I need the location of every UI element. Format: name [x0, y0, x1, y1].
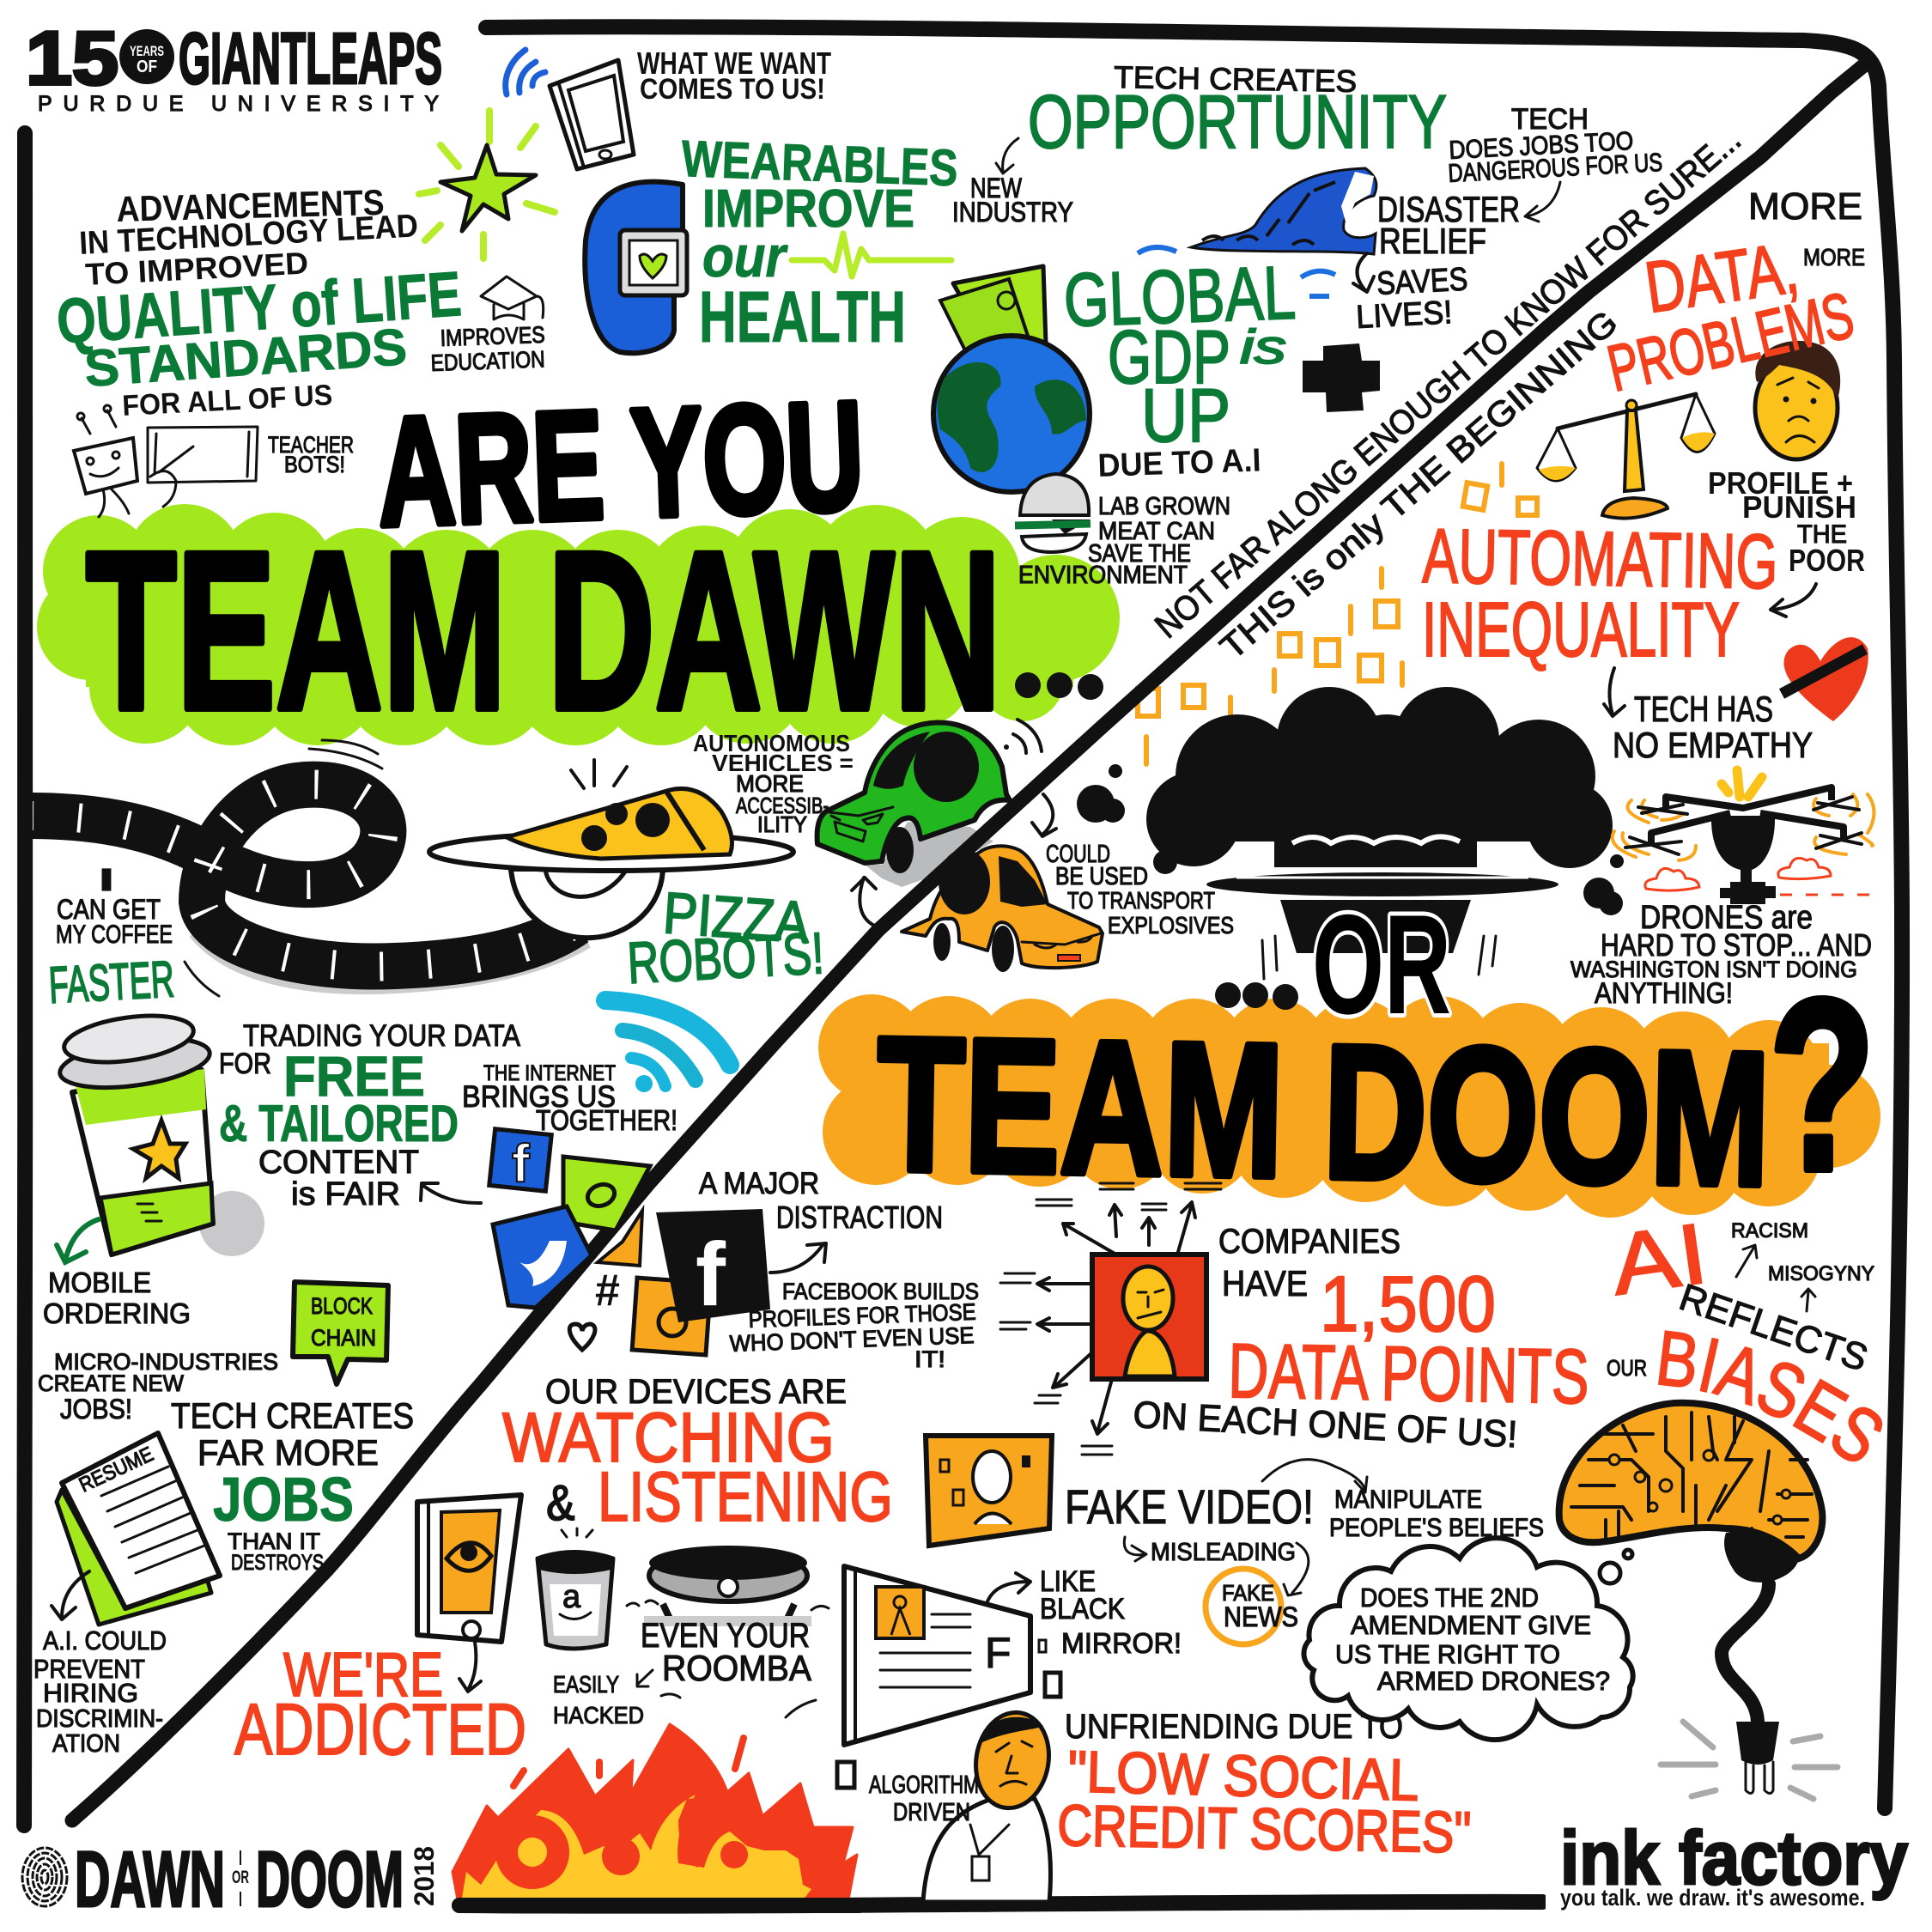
text: even your roomba: HACKED: [553, 1702, 644, 1728]
icon: graduation cap: [481, 276, 544, 319]
wifi over phone: [506, 50, 545, 94]
heading: pizza robots: ROBOTS!: [626, 920, 825, 996]
text: advancements: ADVANCEMENTS: [116, 182, 385, 229]
icon: facebook black square: f: [696, 1224, 726, 1325]
text: fake video: FAKE VIDEO!: [1065, 1479, 1314, 1534]
text: ai could prevent: PREVENT: [33, 1654, 145, 1684]
text: ai could prevent: HIRING: [43, 1678, 138, 1708]
logo: 150 years of giant leaps: OF: [137, 58, 157, 76]
text: drones: ANYTHING!: [1595, 977, 1733, 1010]
text: improves education: IMPROVES: [440, 322, 545, 351]
text: ai reflects our biases: MISOGYNY: [1768, 1262, 1874, 1285]
text: could be used: [1046, 841, 1234, 939]
robot base: [511, 869, 663, 938]
text: trading your data: FOR: [219, 1048, 271, 1080]
icon: hash and heart: #: [595, 1266, 620, 1315]
text: ai could prevent: ATION: [52, 1730, 120, 1758]
road illustration: [30, 740, 580, 996]
text: profile and punish: PROFILE +: [1708, 465, 1853, 501]
text: micro industries: [38, 1349, 278, 1425]
text: major distraction: PROFILES FOR THOSE: [748, 1299, 976, 1333]
logo: 150 years of giant leaps: 15: [26, 15, 118, 100]
text: lab grown meat: [1018, 493, 1230, 589]
plate: [429, 833, 793, 871]
orange blob: team doom background: [818, 994, 1880, 1218]
text: ai could prevent: [33, 1571, 167, 1758]
icon: hash and heart: [569, 1266, 620, 1350]
whiteboard: [148, 427, 258, 483]
text: disaster relief: RELIEF: [1379, 221, 1486, 261]
icon: scales of justice: [1537, 394, 1715, 519]
heading: unfriending low social credit scores: CREDIT SCORES": [1057, 1793, 1472, 1865]
logo: 150 years of giant leaps: GIANTLEAPS: [179, 18, 442, 99]
heading: our devices are watching and listening: OUR DEVICES ARE: [545, 1373, 847, 1411]
icon: phone: [550, 60, 634, 169]
text: even your roomba: EASILY: [553, 1671, 619, 1698]
text: drones: DRONES are: [1640, 900, 1813, 936]
text: coffee faster: CAN GET: [57, 894, 161, 925]
plug sparks: [1661, 1722, 1838, 1799]
text: like black mirror: LIKE: [1040, 1565, 1096, 1598]
text: fake video: MANIPULATE: [1334, 1485, 1482, 1514]
heading: we're addicted: WE'RE: [283, 1641, 443, 1710]
icon: brain with circuits and plug: [1559, 1403, 1838, 1799]
text: autonomous vehicles: AUTONOMOUS: [693, 730, 850, 756]
text: mobile ordering: ORDERING: [43, 1297, 191, 1329]
icon: resume: [57, 1433, 220, 1625]
text: even your roomba: [553, 1617, 811, 1728]
icon: drone: [1613, 770, 1874, 904]
text: companies have 1500 data points: COMPANIES: [1218, 1223, 1400, 1261]
heading: quality of life: [54, 258, 464, 422]
icon: person radiating data: [1000, 1183, 1221, 1455]
text: tech does jobs: DANGEROUS FOR US: [1448, 149, 1663, 188]
text: mobile ordering: MOBILE: [48, 1267, 151, 1298]
logo: ink factory: ink factory: [1560, 1815, 1908, 1900]
heading: tech creates opportunity: [1028, 59, 1447, 164]
text: fake video: [1065, 1460, 1544, 1595]
text: what we want: [637, 46, 831, 106]
text: autonomous vehicles: VEHICLES =: [712, 750, 854, 776]
rays over pizza: [571, 760, 627, 788]
text: improves education: [430, 322, 545, 376]
icon: watch: [585, 182, 687, 353]
wifi signal from car: [1013, 720, 1042, 753]
ecg line: [792, 234, 951, 276]
text: new industry: [952, 138, 1073, 228]
text: trading your data: is FAIR: [291, 1176, 400, 1212]
text: tech creates far more jobs: JOBS: [213, 1466, 354, 1534]
icon: plus sign: [1303, 343, 1380, 412]
text: autonomous vehicles: MORE: [736, 770, 804, 797]
heading: our devices are watching and listening: WATCHING: [502, 1399, 835, 1477]
text: ai reflects our biases: RACISM: [1731, 1219, 1808, 1242]
heading: quality of life: FOR ALL OF US: [121, 379, 333, 422]
text: companies have 1500 data points: ON EACH ONE OF US!: [1132, 1394, 1518, 1455]
heading: wearables improve our health: HEALTH: [699, 276, 906, 357]
text: micro industries: MICRO-INDUSTRIES: [54, 1349, 278, 1375]
text: major distraction: FACEBOOK BUILDS: [782, 1279, 979, 1304]
callout: block chain: [293, 1282, 388, 1384]
logo: dawn or doom 2018: 2018: [409, 1846, 440, 1906]
heading: automating inequality: INEQUALITY: [1422, 587, 1740, 673]
text: tech creates far more jobs: THAN IT: [228, 1528, 320, 1554]
text: drones: [1571, 900, 1872, 1010]
text: micro industries: JOBS!: [60, 1394, 132, 1425]
data arrows: [1037, 1202, 1195, 1434]
heading: global gdp is up: GDP: [1108, 314, 1230, 399]
diagonal text: only the beginning: THIS is only THE BEGINNING: [1213, 303, 1625, 667]
text: trading your data: TRADING YOUR DATA: [243, 1019, 521, 1053]
heading: tech creates opportunity: OPPORTUNITY: [1028, 79, 1447, 164]
text: disaster relief: SAVES: [1376, 261, 1468, 302]
icon: mushroom cloud: [1077, 687, 1624, 953]
text: teacher bots: TEACHER: [268, 432, 354, 458]
heading: quality of life: STANDARDS: [82, 318, 409, 398]
power cord: [1722, 1584, 1769, 1722]
callout: thought bubble about drones: ARMED DRONES?: [1377, 1666, 1610, 1696]
text: tech creates far more jobs: FAR MORE: [197, 1432, 379, 1473]
heading: we're addicted: ADDICTED: [234, 1689, 526, 1770]
text: even your roomba: ROOMBA: [662, 1648, 811, 1688]
text: trading your data: [219, 1019, 521, 1212]
text: lab grown meat: ENVIRONMENT: [1018, 562, 1188, 589]
icon: smart speaker: a: [562, 1579, 581, 1615]
text: ai reflects our biases: REFLECTS: [1674, 1276, 1873, 1380]
icon: sad face: [1755, 341, 1840, 459]
text: autonomous vehicles: [693, 730, 854, 837]
text: improves education: EDUCATION: [430, 346, 545, 376]
title: are you team dawn: ARE YOU: [374, 369, 866, 559]
heading: we're addicted: [234, 1641, 526, 1770]
heading: unfriending low social credit scores: "LOW SOCIAL: [1067, 1739, 1419, 1814]
text: algorithm driven: [837, 1762, 979, 1826]
text: autonomous vehicles: ACCESSIB-: [736, 793, 829, 818]
pizza slice: [507, 788, 732, 859]
heading: pizza robots: [626, 880, 825, 996]
heading: quality of life: QUALITY of LIFE: [54, 258, 464, 357]
text: algorithm driven: DRIVEN: [893, 1799, 970, 1826]
text: major distraction: [699, 1167, 979, 1372]
logo: dawn or doom 2018: [22, 1836, 440, 1923]
text: drones: HARD TO STOP... AND: [1601, 927, 1872, 963]
heading: wearables improve our health: WEARABLES: [681, 130, 959, 197]
logo: dawn or doom 2018: DAWN: [75, 1836, 225, 1923]
text: coffee faster: MY COFFEE: [56, 920, 173, 949]
text: tech does jobs: DOES JOBS TOO: [1449, 127, 1634, 165]
icon: flames: [453, 1724, 857, 1904]
text: major distraction: DISTRACTION: [776, 1200, 943, 1235]
icon: green car: [817, 720, 1042, 887]
icon: burger: [1015, 474, 1091, 552]
title: are you team dawn: [86, 369, 1103, 756]
text: disaster relief: LIVES!: [1355, 295, 1453, 336]
social media icons: f: [512, 1134, 530, 1194]
callout: fake news: NEWS: [1224, 1601, 1298, 1632]
text: disaster relief: [1353, 189, 1520, 336]
icon: coffee cup: [57, 1009, 264, 1256]
icon: social profile book: [844, 1566, 1030, 1745]
pizza robot: [429, 760, 793, 938]
callout: thought bubble about drones: AMENDMENT GIVE: [1351, 1610, 1591, 1640]
text: teacher bots: [268, 432, 354, 477]
logo: 150 years of giant leaps: PURDUE UNIVERSITY: [38, 92, 439, 116]
text: companies have 1500 data points: DATA POINTS: [1228, 1328, 1589, 1420]
orange squares rising from cloud: [1138, 464, 1537, 764]
text: ai could prevent: DISCRIMIN-: [36, 1705, 163, 1733]
text: companies have 1500 data points: [1132, 1223, 1589, 1455]
logo: 150 years of giant leaps: [26, 15, 442, 116]
text: major distraction: A MAJOR: [699, 1167, 819, 1200]
text: like black mirror: [1039, 1565, 1182, 1697]
title: team doom: ?: [1769, 949, 1875, 1222]
icon: man with badge: [923, 1707, 1056, 1902]
text: tech has no empathy: NO EMPATHY: [1613, 725, 1813, 765]
callout: block chain: CHAIN: [311, 1325, 376, 1351]
heading: global gdp is up: UP: [1141, 373, 1230, 458]
text: lab grown meat: LAB GROWN: [1098, 493, 1230, 520]
icon: social profile book: F: [985, 1629, 1012, 1677]
arrows around cars: [852, 794, 1056, 927]
heading: our devices are watching and listening: [502, 1373, 893, 1536]
heading: wearables improve our health: our: [702, 224, 788, 289]
logo: dawn or doom 2018: DOOM: [256, 1836, 404, 1923]
icon: wave: [1138, 168, 1376, 296]
text: trading your data: & TAILORED: [219, 1095, 459, 1152]
heading: wearables improve our health: [681, 130, 959, 357]
heading: wearables improve our health: IMPROVE: [702, 179, 914, 239]
text: profile and punish: THE: [1797, 520, 1847, 549]
icon: video screen with face: [926, 1436, 1052, 1546]
icon: facebook black square: [632, 1209, 826, 1355]
heading: global gdp is up: is: [1240, 319, 1286, 374]
text: what we want: COMES TO US!: [640, 73, 825, 106]
text: could be used: EXPLOSIVES: [1108, 912, 1234, 939]
callout: block chain: BLOCK: [311, 1293, 373, 1319]
heading: our devices are watching and listening: LISTENING: [598, 1458, 893, 1536]
fingerprint icon: [22, 1848, 67, 1906]
text: the internet: TOGETHER!: [536, 1104, 677, 1136]
icon: teacher robot: [74, 405, 258, 517]
callout: thought bubble about drones: US THE RIGHT TO: [1335, 1639, 1560, 1669]
text: advancements: IN TECHNOLOGY LEAD: [78, 208, 419, 262]
icon: thought dots: [1600, 1550, 1632, 1583]
text: drones: WASHINGTON ISN'T DOING: [1571, 957, 1857, 982]
text: major distraction: WHO DON'T EVEN USE: [729, 1322, 975, 1357]
icon: smartphone with eye: [417, 1495, 521, 1692]
icon: heart crossed out: [1782, 637, 1868, 721]
text: ai reflects our biases: AI: [1605, 1205, 1713, 1314]
title: or: [1215, 885, 1496, 1043]
text: like black mirror: MIRROR!: [1061, 1627, 1182, 1659]
heading: more data more problems: MORE: [1803, 244, 1865, 270]
heading: global gdp is up: [1062, 250, 1297, 484]
icon: smart speaker: [538, 1528, 613, 1649]
text: algorithm driven: ALGORITHM: [869, 1771, 979, 1799]
heading: global gdp is up: GLOBAL: [1062, 250, 1297, 343]
callout: thought bubble about drones: [1303, 1538, 1633, 1740]
text: tech creates far more jobs: [171, 1395, 414, 1575]
text: micro industries: CREATE NEW: [38, 1370, 184, 1396]
heading: unfriending low social credit scores: [1057, 1708, 1472, 1865]
text: advancements: TO IMPROVED: [84, 245, 309, 292]
text: could be used: COULD: [1046, 841, 1110, 868]
text: ai reflects our biases: OUR: [1607, 1355, 1647, 1381]
heading: pizza robots: PIZZA: [661, 880, 811, 956]
text: what we want: WHAT WE WANT: [637, 46, 831, 81]
text: even your roomba: EVEN YOUR: [641, 1617, 810, 1655]
heading: tech creates opportunity: TECH CREATES: [1114, 59, 1358, 99]
text: teacher bots: BOTS!: [284, 452, 345, 477]
text: lab grown meat: MEAT CAN: [1098, 518, 1215, 545]
title: or: OR: [1312, 885, 1451, 1043]
text: could be used: BE USED: [1055, 863, 1148, 890]
text: tech does jobs: [1448, 103, 1663, 222]
text: trading your data: FREE: [283, 1044, 425, 1108]
text: the internet: [462, 1061, 677, 1136]
green blob: team dawn background: [37, 504, 1120, 745]
text: mobile ordering: [43, 1219, 191, 1329]
text: disaster relief: DISASTER: [1377, 189, 1520, 229]
text: coffee faster: I: [96, 862, 117, 897]
text: trading your data: CONTENT: [258, 1145, 419, 1181]
text: fake video: PEOPLE'S BELIEFS: [1329, 1514, 1544, 1542]
heading: automating inequality: AUTOMATING: [1422, 513, 1778, 605]
text: tech creates far more jobs: TECH CREATES: [171, 1395, 414, 1436]
icon: resume: RESUME: [76, 1443, 157, 1497]
heading: our devices are watching and listening: &: [545, 1474, 576, 1532]
text: ai could prevent: A.I. COULD: [43, 1625, 167, 1656]
diagonal text: not far along enough: NOT FAR ALONG ENOUGH TO KNOW FOR SURE...: [1148, 120, 1748, 646]
heading: unfriending low social credit scores: UNFRIENDING DUE TO: [1065, 1708, 1403, 1746]
text: profile and punish: PUNISH: [1742, 489, 1856, 525]
callout: fake news: [1206, 1569, 1298, 1644]
text: like black mirror: BLACK: [1040, 1593, 1125, 1625]
callout: fake news: FAKE: [1222, 1580, 1274, 1606]
heading: more data more problems: DATA,: [1640, 227, 1803, 328]
text: lab grown meat: SAVE THE: [1088, 540, 1191, 568]
heading: more data more problems: MORE: [1748, 185, 1862, 228]
icon: roomba: [627, 1546, 829, 1717]
text: advancements: [78, 182, 419, 292]
text: ai reflects our biases: BIASES: [1658, 1330, 1882, 1461]
text: profile and punish: POOR: [1789, 543, 1865, 578]
logo: 150 years of giant leaps: YEARS: [130, 43, 164, 59]
text: tech has no empathy: TECH HAS: [1634, 689, 1773, 729]
text: major distraction: IT!: [914, 1346, 945, 1372]
text: autonomous vehicles: ILITY: [757, 811, 807, 837]
callout: thought bubble about drones: DOES THE 2ND: [1360, 1583, 1539, 1613]
text: coffee faster: FASTER: [47, 950, 175, 1014]
icon: orange car: [902, 846, 1103, 972]
text: new industry: NEW: [970, 173, 1023, 204]
heading: more data more problems: [1601, 185, 1865, 406]
logo: dawn or doom 2018: OR: [232, 1868, 249, 1887]
title: are you team dawn: TEAM DAWN: [86, 505, 1001, 756]
text: companies have 1500 data points: 1,500: [1320, 1261, 1496, 1348]
icon: star: [419, 111, 555, 258]
text: tech does jobs: TECH: [1511, 103, 1589, 136]
icon: wifi cyan: [605, 1000, 730, 1092]
text: the internet: BRINGS US: [462, 1080, 616, 1114]
text: new industry: INDUSTRY: [952, 197, 1073, 228]
social media icons: [489, 1129, 650, 1308]
logo: ink factory: you talk. we draw. it's awesome.: [1560, 1885, 1865, 1911]
text: companies have 1500 data points: HAVE: [1222, 1263, 1308, 1303]
text: ai reflects our biases: [1605, 1205, 1882, 1461]
heading: automating inequality: [1422, 513, 1778, 673]
text: the internet: THE INTERNET: [483, 1061, 616, 1085]
text: tech creates far more jobs: DESTROYS: [231, 1551, 324, 1575]
heading: global gdp is up: DUE TO A.I: [1097, 442, 1261, 484]
text: coffee faster: [47, 862, 175, 1014]
text: profile and punish: [1708, 465, 1865, 617]
text: fake video: MISLEADING: [1151, 1539, 1296, 1566]
text: could be used: TO TRANSPORT: [1067, 887, 1215, 914]
icon: globe and money: [933, 266, 1090, 492]
text: tech has no empathy: [1604, 668, 1813, 765]
